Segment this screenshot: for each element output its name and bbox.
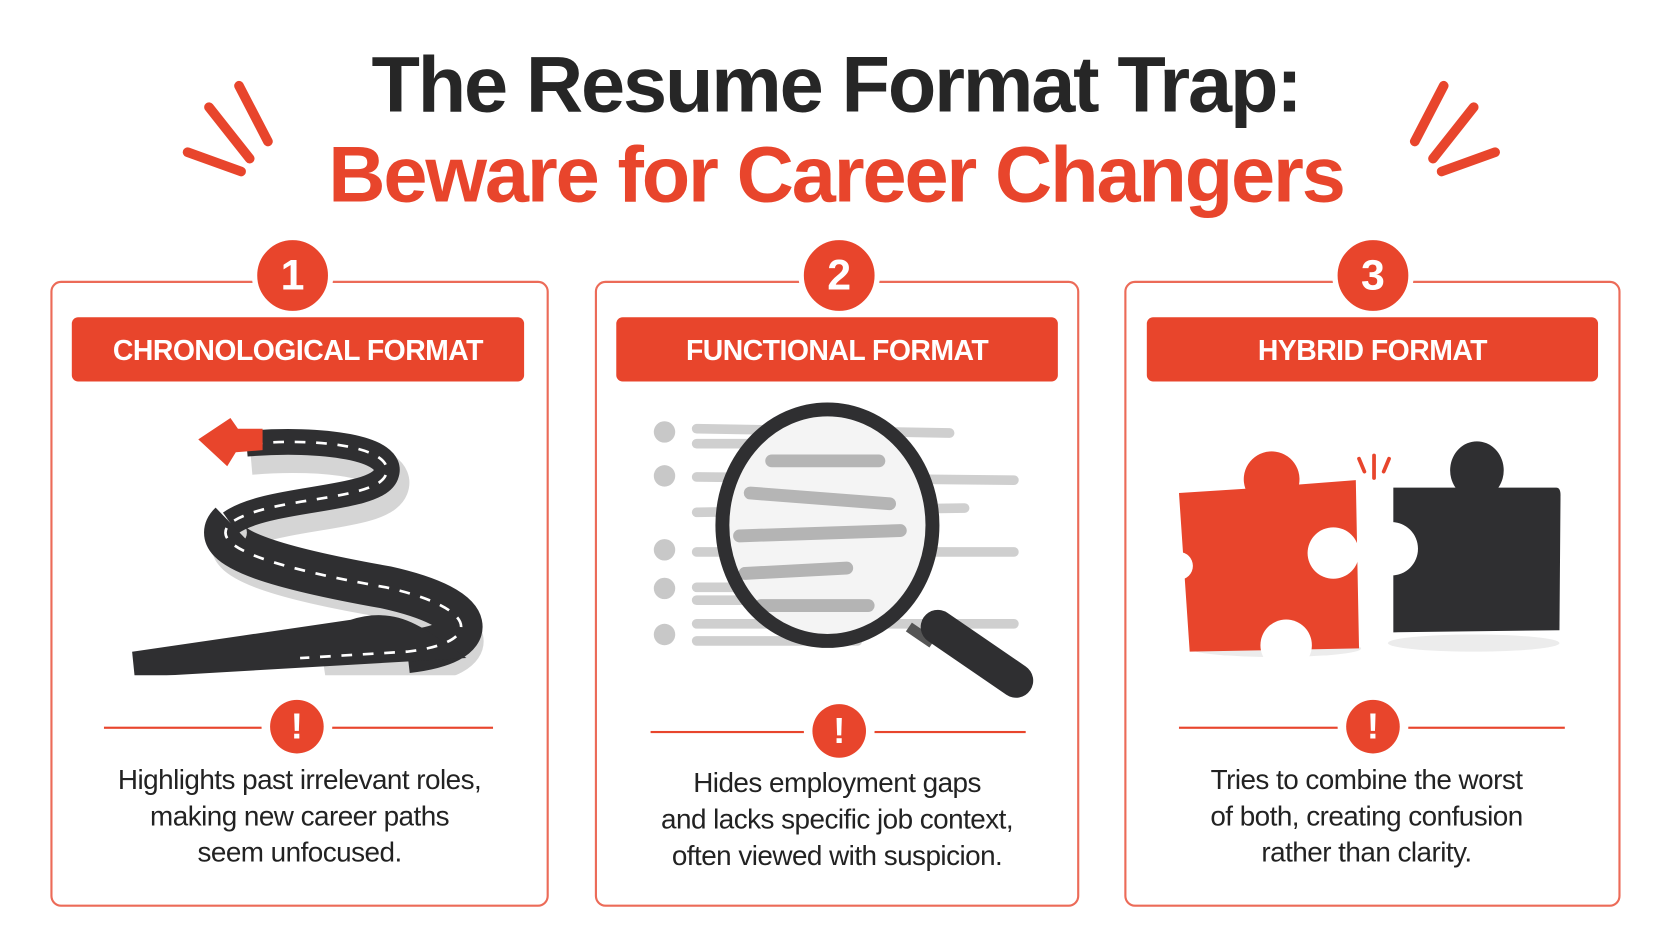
description 1: making new career paths [150,800,449,832]
title: Beware for Career Changers [328,130,1344,219]
number 1: 1 [281,252,305,299]
description 2: often viewed with suspicion. [672,839,1002,871]
description 3: of both, creating confusion [1210,800,1523,832]
description 3 [1210,763,1523,868]
number 3 [1332,235,1414,316]
title: The Resume Format Trap: [371,40,1301,129]
header: hybrid [1147,317,1598,382]
header: functional [616,317,1058,382]
description 1: Highlights past irrelevant roles, [118,763,481,795]
number 2: 2 [827,252,851,299]
panel: functional [595,281,1079,907]
description 2: and lacks specific job context, [661,803,1013,835]
icon: magnifier over blurred list [654,402,1034,698]
description 2 [661,766,1013,871]
icon: right alert rays [1410,80,1500,176]
description 2: Hides employment gaps [693,766,981,798]
panel: chronological [50,281,549,907]
alert 3: ! [1367,706,1379,747]
title [328,40,1344,219]
icon: mismatched puzzle pieces [1179,441,1560,657]
header: hybrid: HYBRID FORMAT [1258,334,1487,367]
number 3: 3 [1361,252,1385,299]
description 1 [118,763,481,868]
icon: winding road [132,418,484,676]
alert 1: ! [291,706,303,747]
icon: left alert rays [182,80,273,176]
description 3: Tries to combine the worst [1211,763,1522,795]
description 3: rather than clarity. [1261,836,1472,868]
alert 2: ! [833,711,845,751]
header: functional: FUNCTIONAL FORMAT [686,334,988,367]
number 2 [798,235,880,316]
header: chronological [72,317,524,382]
header: chronological: CHRONOLOGICAL FORMAT [113,334,483,367]
number 1 [252,235,333,316]
panel: hybrid [1124,281,1621,907]
description 1: seem unfocused. [197,836,402,868]
